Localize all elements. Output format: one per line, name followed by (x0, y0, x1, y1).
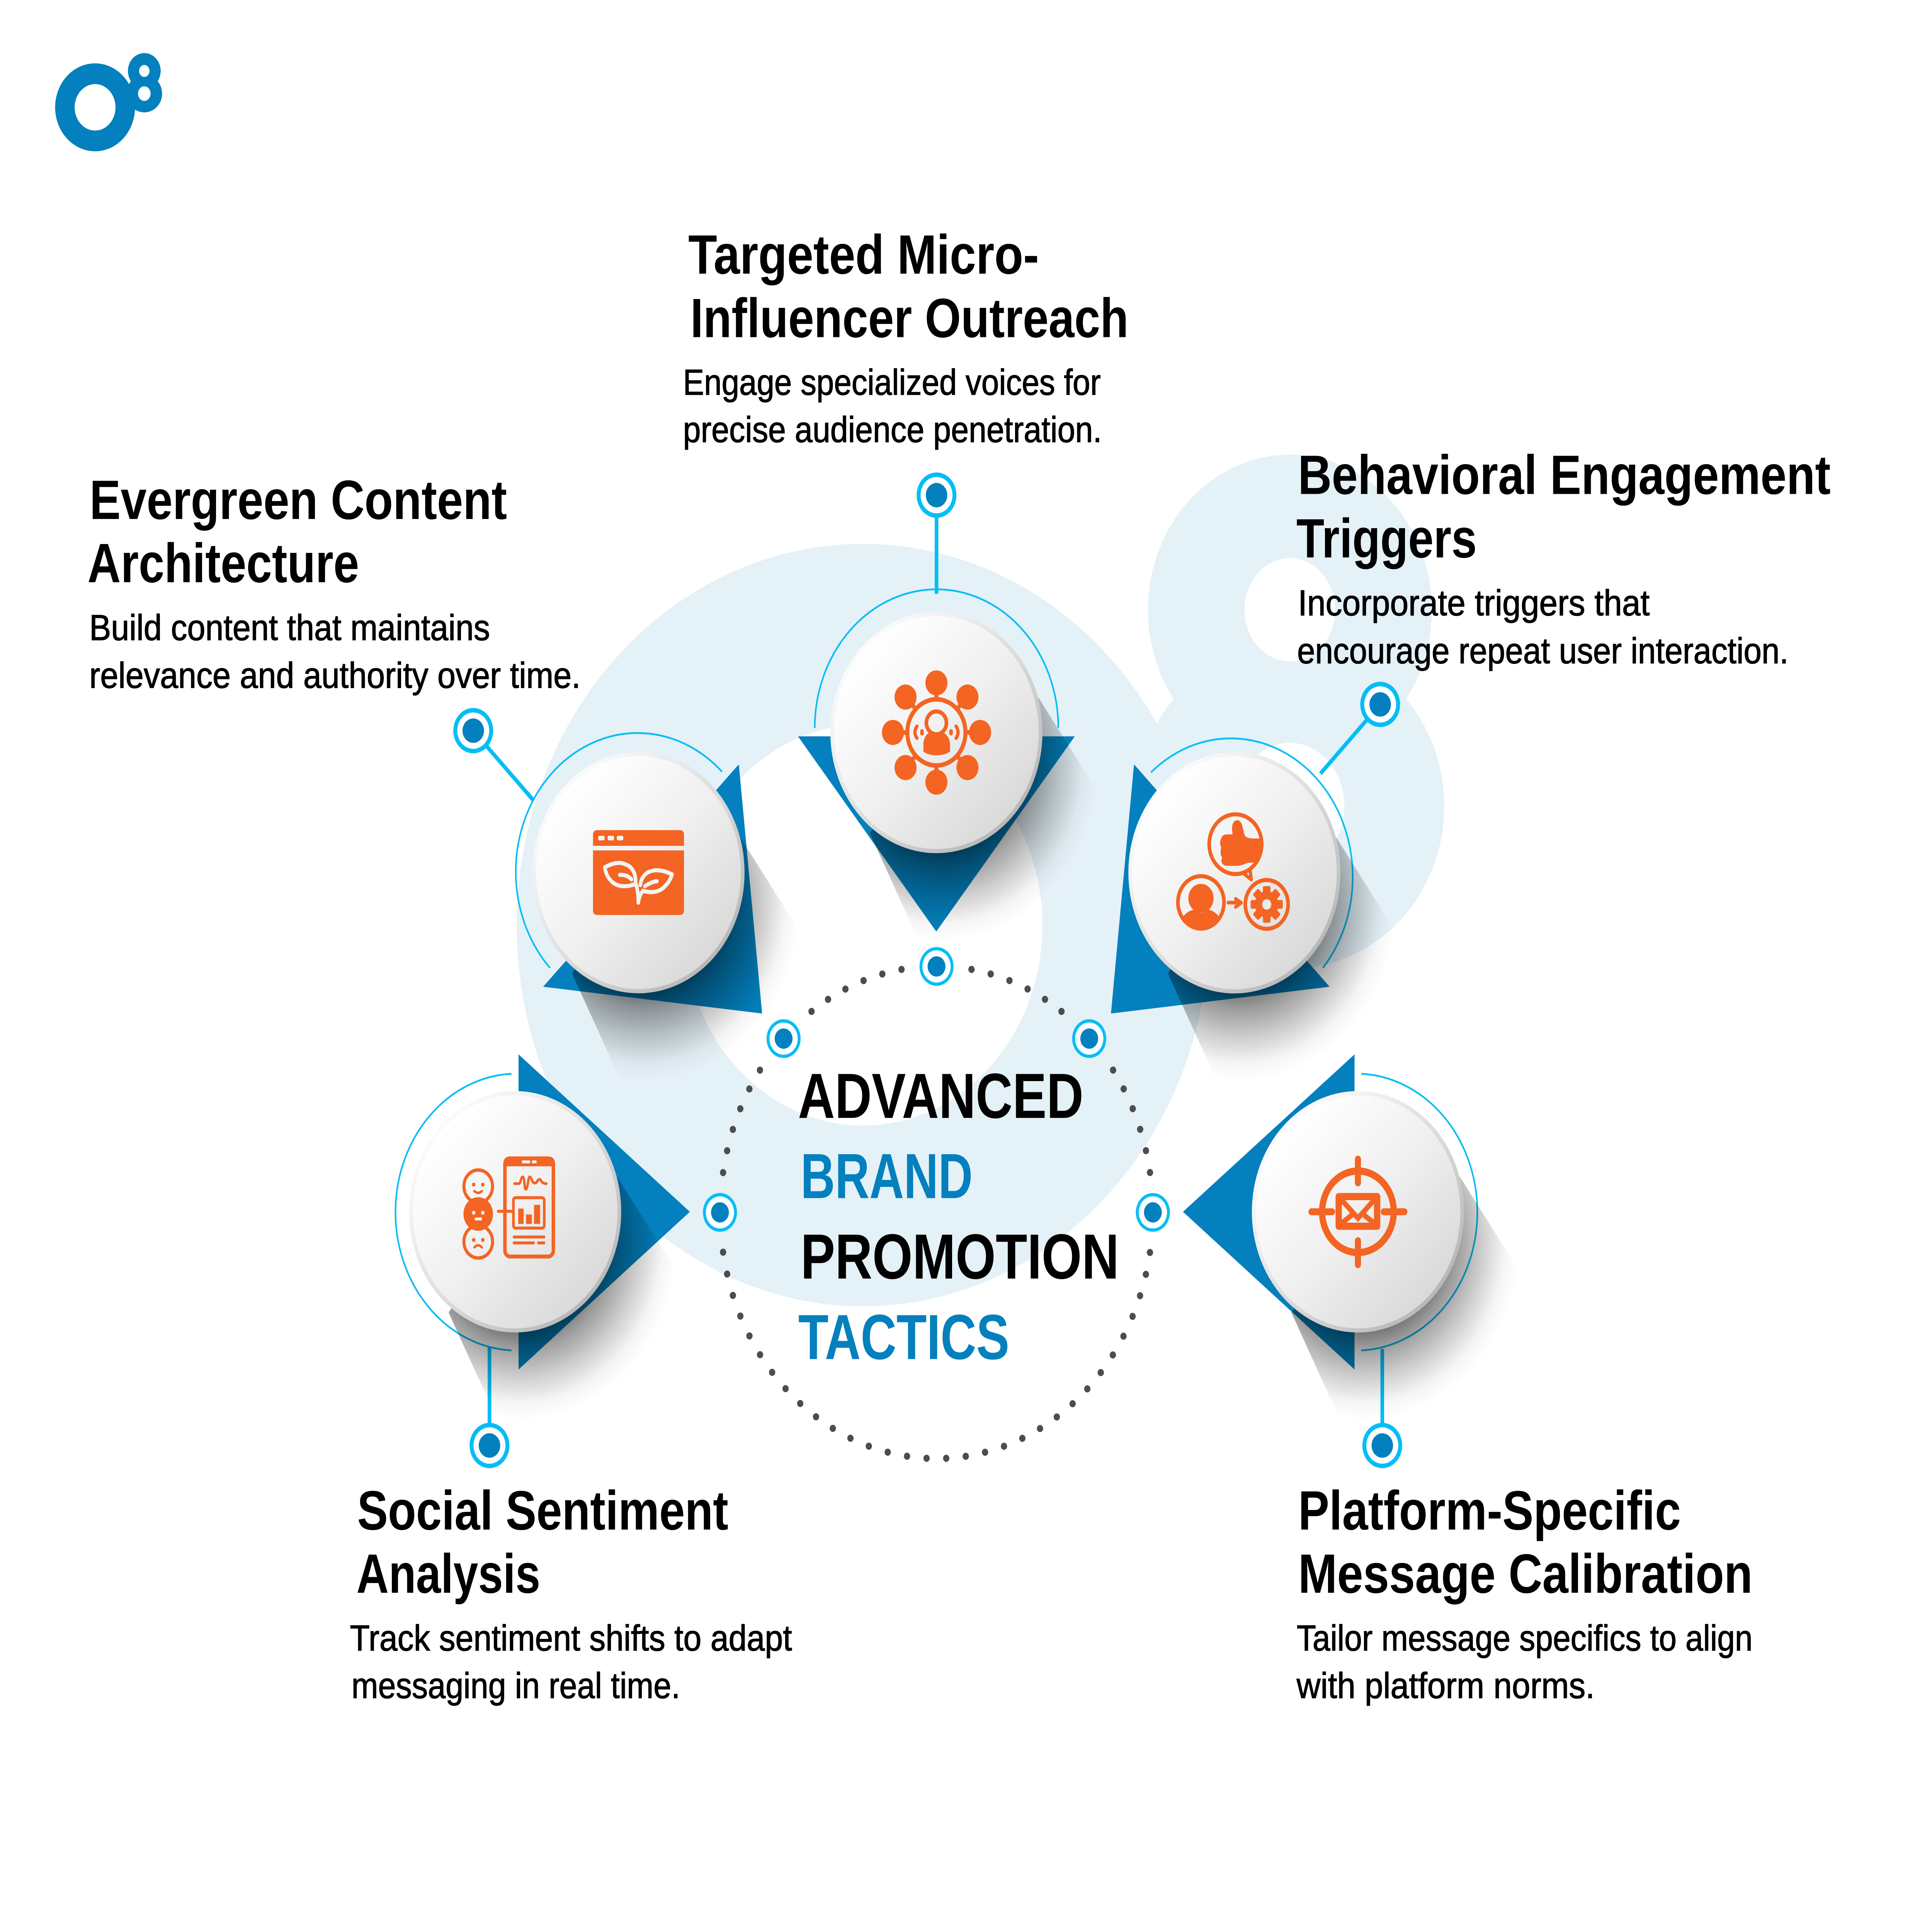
description: Tailor message specifics to align (1297, 1618, 1753, 1658)
dotted central circle (723, 969, 1150, 1459)
heading (1298, 1480, 1753, 1605)
disc with shadow (532, 752, 874, 1185)
callout: behavioral engagement triggers (1296, 444, 1831, 671)
description: Build content that maintains (89, 607, 490, 648)
node: social sentiment (395, 1054, 751, 1525)
title (798, 1060, 1119, 1372)
description (683, 362, 1102, 450)
node: behavioral engagement (1111, 684, 1470, 1186)
heading (356, 1480, 728, 1605)
description (350, 1618, 792, 1706)
description (89, 607, 581, 696)
callout: evergreen content architecture (87, 469, 581, 696)
heading (87, 469, 507, 594)
title: ADVANCED (798, 1060, 1083, 1131)
description: messaging in real time. (352, 1665, 680, 1706)
icon: target with envelope (1311, 1159, 1405, 1265)
heading: Architecture (87, 532, 359, 594)
connector end dot (918, 475, 954, 515)
heading: Platform-Specific (1298, 1480, 1681, 1541)
callout: targeted micro-influencer outreach (683, 224, 1129, 450)
description: Incorporate triggers that (1298, 582, 1650, 623)
description (1296, 1618, 1753, 1706)
callout: platform-specific message calibration (1296, 1480, 1753, 1706)
title: BRAND (801, 1140, 973, 1212)
heading (688, 224, 1129, 349)
outer arc (516, 733, 722, 968)
icon: browser with sprout (593, 830, 684, 915)
heading: Influencer Outreach (690, 287, 1129, 349)
disc with shadow (830, 612, 1172, 1046)
background logo watermark (517, 455, 1444, 1306)
description: Engage specialized voices for (683, 362, 1101, 403)
description: relevance and authority over time. (89, 655, 581, 696)
icon: sentiment faces and phone (463, 1156, 555, 1258)
heading: Analysis (356, 1543, 540, 1605)
outer arc (395, 1074, 512, 1350)
description (1297, 582, 1789, 671)
connector line (1320, 704, 1380, 774)
heading: Behavioral Engagement (1298, 444, 1831, 506)
node: micro-influencer outreach (798, 475, 1172, 1046)
pointer triangle (1111, 764, 1330, 1014)
inner ring markers (704, 949, 1168, 1230)
heading: Social Sentiment (357, 1480, 728, 1541)
outer arc (1361, 1074, 1477, 1350)
node: evergreen content (455, 710, 874, 1185)
connector end dot (1364, 1425, 1400, 1466)
connector end dot (455, 710, 491, 751)
description: with platform norms. (1296, 1665, 1595, 1706)
heading: Message Calibration (1298, 1543, 1753, 1605)
pointer triangle (543, 764, 762, 1014)
pointer triangle (1183, 1054, 1354, 1369)
icon: thumbs up, person, gear (1178, 814, 1288, 930)
brand logo (55, 53, 162, 151)
connector line (934, 495, 939, 594)
node: platform-specific (1183, 1054, 1594, 1525)
description: encourage repeat user interaction. (1297, 631, 1789, 671)
connector end dot (1362, 684, 1398, 725)
outer arc (1151, 738, 1353, 968)
connector line (487, 1347, 492, 1446)
callout: social sentiment analysis (350, 1480, 792, 1706)
heading (1296, 444, 1831, 569)
disc with shadow (1252, 1091, 1594, 1525)
outer arc (815, 589, 1058, 728)
heading: Triggers (1296, 507, 1477, 569)
title: PROMOTION (801, 1221, 1119, 1292)
disc with shadow (1128, 752, 1470, 1186)
pointer triangle (798, 736, 1075, 932)
heading: Targeted Micro- (688, 224, 1039, 286)
description: precise audience penetration. (683, 409, 1102, 450)
heading: Evergreen Content (90, 469, 507, 531)
connector end dot (471, 1425, 507, 1466)
disc with shadow (409, 1091, 751, 1525)
title: TACTICS (798, 1301, 1009, 1372)
connector line (473, 731, 534, 801)
icon: influencer network (882, 670, 991, 795)
connector line (1379, 1349, 1385, 1446)
pointer triangle (519, 1054, 690, 1369)
description: Track sentiment shifts to adapt (350, 1618, 792, 1658)
